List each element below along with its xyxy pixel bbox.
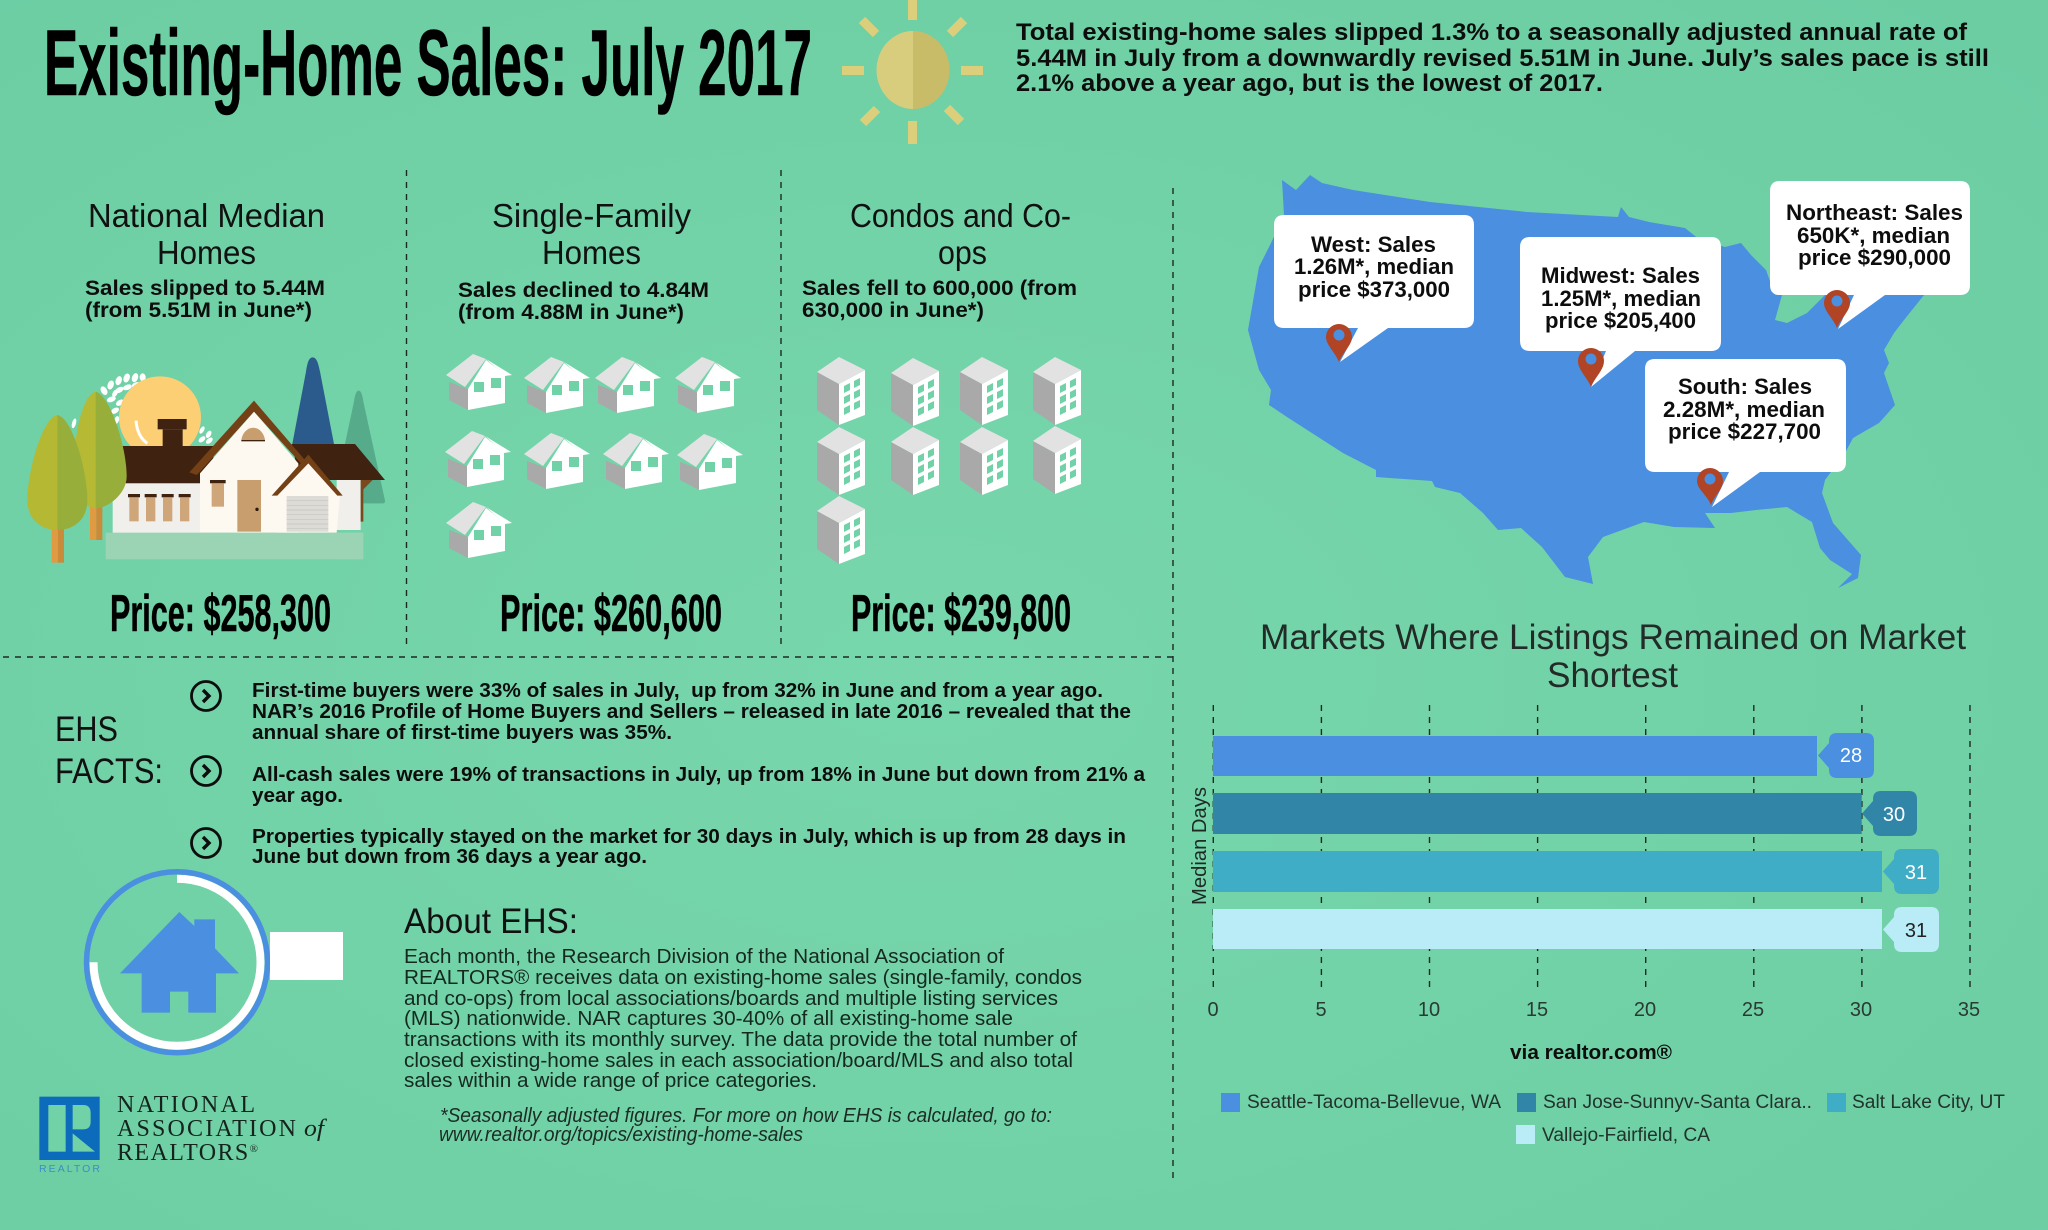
x axis labels: 15 xyxy=(1526,999,1548,1021)
heading: single-family homes: Homes xyxy=(542,234,641,271)
chart title xyxy=(1260,618,1966,695)
callout: south: 2.28M*, median xyxy=(1663,397,1825,422)
callout: midwest xyxy=(1520,237,1721,387)
y axis label: Median Days xyxy=(1189,787,1211,905)
callout: south xyxy=(1645,359,1846,507)
fact: days on market xyxy=(252,825,1126,868)
heading: condos and co-ops: Condos and Co- xyxy=(850,197,1071,234)
chart legend xyxy=(1221,1092,2005,1146)
chart legend: San Jose-Sunnyv-Santa Clara.. xyxy=(1543,1092,1812,1113)
fact: first-time buyers xyxy=(252,679,1131,744)
heading: national median homes xyxy=(88,197,325,271)
about ehs body text: and co-ops) from local associations/boards and multiple listing services xyxy=(404,987,1058,1010)
map: united states xyxy=(1248,175,1924,588)
callout: west: West: Sales xyxy=(1311,232,1436,257)
national sales text: (from 5.51M in June*) xyxy=(85,299,312,322)
callout: south: price $227,700 xyxy=(1668,419,1821,444)
fact: days on market: June but down from 36 days a year ago. xyxy=(252,845,647,868)
fact: days on market: Properties typically stayed on the market for 30 days in July, which is up from 28 days in xyxy=(252,825,1126,848)
callout: west xyxy=(1274,215,1474,362)
single-family sales text xyxy=(458,279,709,324)
chart source: via realtor.com® xyxy=(1510,1042,1672,1064)
heading: ehs facts: EHS xyxy=(55,710,118,749)
chart legend: Vallejo-Fairfield, CA xyxy=(1542,1125,1710,1146)
about ehs body text xyxy=(404,945,1082,1092)
x axis labels: 5 xyxy=(1315,999,1327,1021)
chart legend: Salt Lake City, UT xyxy=(1852,1092,2005,1113)
callout: midwest: 1.25M*, median xyxy=(1541,286,1701,311)
x axis labels: 30 xyxy=(1850,999,1872,1021)
condo sales text: Sales fell to 600,000 (from xyxy=(802,277,1077,300)
intro paragraph: 5.44M in July from a downwardly revised 5.51M in June. July’s sales pace is still xyxy=(1016,45,1989,72)
illustration: house with trees xyxy=(27,357,385,563)
heading: single-family homes xyxy=(492,197,691,271)
heading: condos and co-ops: ops xyxy=(938,234,987,271)
bar: seattle 28 xyxy=(1213,733,1874,778)
callout: west: 1.26M*, median xyxy=(1294,254,1454,279)
pictogram: nine houses xyxy=(445,354,743,558)
callout: west: price $373,000 xyxy=(1298,277,1450,302)
about ehs body text: closed existing-home sales in each association/board/MLS and also total xyxy=(404,1049,1073,1072)
fact: first-time buyers: NAR’s 2016 Profile of Home Buyers and Sellers – released in late 2016 – revealed that the xyxy=(252,700,1131,723)
logo: national association of realtors: ® xyxy=(250,1143,258,1155)
callout: northeast: Northeast: Sales xyxy=(1786,200,1963,225)
bar: san jose 30 xyxy=(1213,791,1917,836)
logo: national association of realtors: of xyxy=(304,1116,328,1142)
heading: single-family homes: Single-Family xyxy=(492,197,691,234)
x axis labels: 0 xyxy=(1207,999,1219,1021)
chart title: Markets Where Listings Remained on Market xyxy=(1260,618,1966,657)
logo: national association of realtors: NATIONAL xyxy=(117,1092,255,1118)
x axis labels: 10 xyxy=(1418,999,1440,1021)
condo sales text: 630,000 in June*) xyxy=(802,299,984,322)
heading: national median homes: Homes xyxy=(157,234,256,271)
bar: vallejo 31 xyxy=(1213,907,1939,952)
footnote: www.realtor.org/topics/existing-home-sales xyxy=(439,1124,803,1146)
single-family sales text: (from 4.88M in June*) xyxy=(458,301,684,324)
chart legend: Seattle-Tacoma-Bellevue, WA xyxy=(1247,1092,1501,1113)
bar: vallejo 31: 31 xyxy=(1905,920,1927,942)
x axis labels: 20 xyxy=(1634,999,1656,1021)
national sales text: Sales slipped to 5.44M xyxy=(85,277,325,300)
icon: house in ring xyxy=(86,872,343,1053)
fact: first-time buyers: annual share of first-time buyers was 35%. xyxy=(252,721,672,744)
icon: arrow circle 3 xyxy=(192,828,220,858)
bar: salt lake city 31 xyxy=(1213,849,1939,894)
heading: national median homes: National Median xyxy=(88,197,325,234)
intro paragraph: 2.1% above a year ago, but is the lowest of 2017. xyxy=(1016,70,1603,97)
logo: national association of realtors: ASSOCIATION xyxy=(117,1116,296,1142)
fact: first-time buyers: First-time buyers were 33% of sales in July, up from 32% in June and from a year ago. xyxy=(252,679,1103,702)
callout: midwest: price $205,400 xyxy=(1545,308,1696,333)
x axis labels xyxy=(1207,999,1980,1021)
footnote: *Seasonally adjusted figures. For more on how EHS is calculated, go to: xyxy=(440,1105,1052,1127)
logo: national association of realtors: REALTORS xyxy=(117,1140,248,1166)
icon: arrow circle 1 xyxy=(192,682,220,710)
fact: all-cash sales xyxy=(252,763,1146,807)
fact: all-cash sales: All-cash sales were 19% of transactions in July, up from 18% in June but down from 21% a xyxy=(252,763,1146,786)
title: Existing-Home Sales: July 2017 xyxy=(44,10,812,115)
x axis labels: 25 xyxy=(1742,999,1764,1021)
condo price: Price: $239,800 xyxy=(851,585,1071,643)
icon: arrow circle 2 xyxy=(192,756,220,786)
about ehs body text: sales within a wide range of price categories. xyxy=(404,1069,817,1092)
bar: san jose 30: 30 xyxy=(1883,804,1905,826)
chart title: Shortest xyxy=(1547,656,1678,695)
heading: about ehs: About EHS: xyxy=(404,902,578,941)
panel: condos and co-ops xyxy=(802,197,1081,643)
heading: ehs facts: FACTS: xyxy=(55,752,163,791)
panel: national median homes xyxy=(27,197,385,643)
logo: national association of realtors xyxy=(39,1092,328,1175)
about ehs body text: REALTORS® receives data on existing-home sales (single-family, condos xyxy=(404,966,1082,989)
panel: single-family homes xyxy=(445,197,743,643)
bar: salt lake city 31: 31 xyxy=(1905,862,1927,884)
intro paragraph: Total existing-home sales slipped 1.3% to a seasonally adjusted annual rate of xyxy=(1016,19,1968,46)
footnote xyxy=(439,1105,1052,1146)
single-family sales text: Sales declined to 4.84M xyxy=(458,279,709,302)
heading: ehs facts xyxy=(55,710,163,791)
icon: sun xyxy=(842,0,983,144)
intro paragraph xyxy=(1016,19,1989,97)
fact: all-cash sales: year ago. xyxy=(252,784,343,807)
about ehs body text: (MLS) nationwide. NAR captures 30-40% of all existing-home sale xyxy=(404,1007,1013,1030)
logo: national association of realtors: REALTOR xyxy=(39,1163,100,1175)
bar chart: median days on market xyxy=(1189,705,1980,1021)
callout: south: South: Sales xyxy=(1678,374,1812,399)
national price: Price: $258,300 xyxy=(110,585,331,643)
x axis labels: 35 xyxy=(1958,999,1980,1021)
about ehs body text: transactions with its monthly survey. The data provide the total number of xyxy=(404,1028,1077,1051)
bar: seattle 28: 28 xyxy=(1840,745,1862,767)
condo sales text xyxy=(802,277,1077,322)
heading: condos and co-ops xyxy=(850,197,1071,271)
callout: northeast: 650K*, median xyxy=(1797,223,1950,248)
callout: northeast: price $290,000 xyxy=(1798,245,1951,270)
single-family price: Price: $260,600 xyxy=(500,585,722,643)
callout: midwest: Midwest: Sales xyxy=(1541,263,1700,288)
national sales text xyxy=(85,277,325,322)
about ehs body text: Each month, the Research Division of the National Association of xyxy=(404,945,1004,968)
pictogram: nine buildings xyxy=(817,357,1081,564)
callout: northeast xyxy=(1770,181,1970,329)
